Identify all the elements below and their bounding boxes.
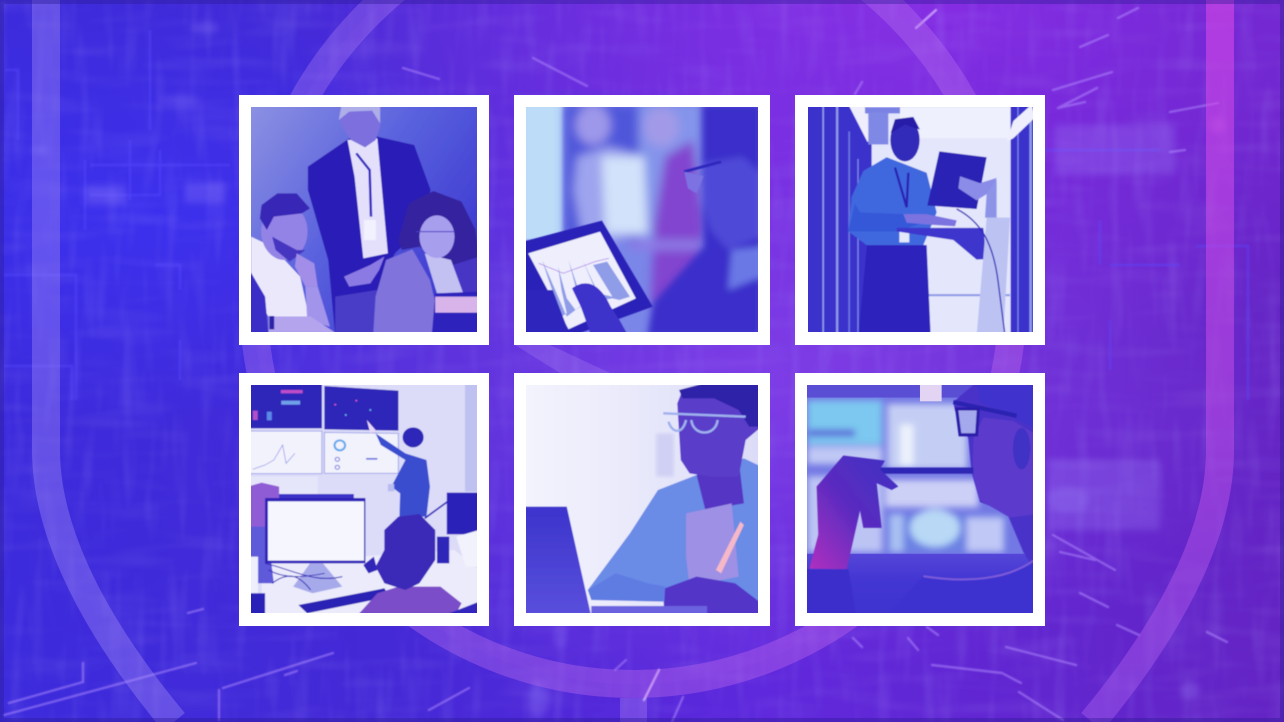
seated colleague bbox=[356, 514, 479, 617]
blurred screens bbox=[807, 400, 1007, 552]
presenter bbox=[367, 420, 430, 517]
ring bbox=[253, 0, 1013, 722]
seated woman bbox=[373, 191, 479, 336]
workstation bbox=[897, 151, 1010, 335]
man's head bbox=[953, 382, 1037, 573]
tablet bbox=[523, 221, 653, 336]
desk and monitors bbox=[248, 483, 479, 617]
panel: team meeting photo bbox=[239, 95, 489, 345]
server racks bbox=[805, 104, 1035, 335]
panel: operations centre photo bbox=[239, 373, 489, 626]
panel: woman at laptop photo bbox=[514, 373, 770, 626]
background circuit lines bbox=[4, 30, 1248, 400]
standing man bbox=[308, 105, 431, 336]
technician bbox=[848, 117, 957, 335]
hand and pen bbox=[807, 454, 1033, 593]
woman bbox=[588, 382, 761, 617]
foreground person bbox=[647, 104, 761, 336]
blurred colleagues bbox=[565, 104, 704, 303]
panel: tablet chart photo bbox=[514, 95, 770, 345]
wall screens bbox=[248, 382, 398, 474]
left man bbox=[248, 193, 335, 336]
panel: server room photo bbox=[795, 95, 1045, 345]
laptop bbox=[523, 507, 591, 617]
panel: man with pen photo bbox=[795, 373, 1045, 626]
